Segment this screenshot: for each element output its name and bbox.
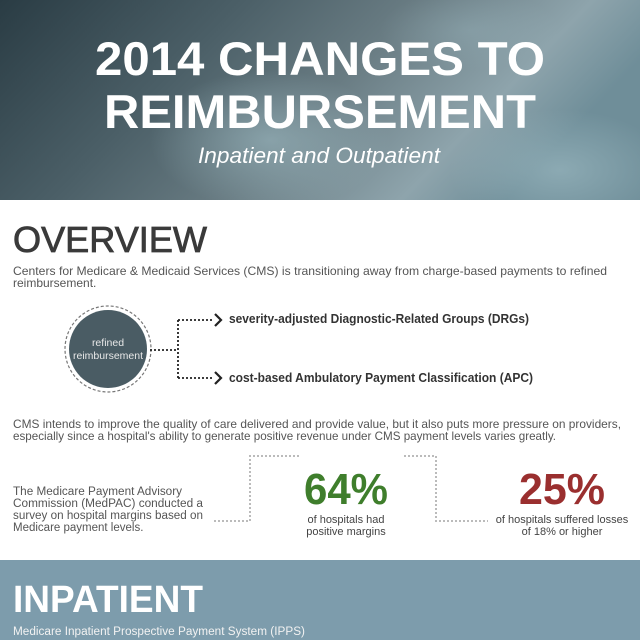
stat: 25%: of 18% or higher [522, 526, 603, 538]
connector arrows [150, 320, 214, 378]
circle: refined reimbursement: refined [92, 337, 124, 349]
circle: refined reimbursement [65, 306, 151, 392]
subtitle: Inpatient and Outpatient [198, 143, 441, 168]
branch labels: severity-adjusted Diagnostic-Related Groups (DRGs) [229, 311, 529, 326]
circle: refined reimbursement: reimbursement [73, 350, 143, 362]
intro text: reimbursement. [13, 276, 96, 290]
MedPAC text [13, 486, 204, 534]
paragraph: pressure: CMS intends to improve the quality of care delivered and provide value, but it also puts more pressure on providers, [13, 417, 621, 431]
paragraph: pressure: especially since a hospital's ability to generate positive revenue under CMS payment levels varies greatly. [13, 429, 556, 443]
header banner [0, 0, 640, 200]
MedPAC text: The Medicare Payment Advisory [13, 486, 182, 498]
stat: 64% [304, 465, 388, 538]
dotted stat connectors [214, 456, 488, 521]
intro text [13, 264, 607, 290]
stat: 64%: positive margins [306, 526, 386, 538]
stat: 64%: 64% [304, 465, 388, 514]
intro text: Centers for Medicare & Medicaid Services (CMS) is transitioning away from charge-based payments to refined [13, 264, 607, 278]
stat: 64%: of hospitals had [307, 514, 385, 526]
diagram: refined reimbursement [65, 306, 533, 392]
MedPAC text: Commission (MedPAC) conducted a [13, 498, 204, 510]
stat: 25%: 25% [519, 465, 605, 514]
branch labels: cost-based Ambulatory Payment Classification (APC) [229, 370, 533, 385]
MedPAC text: Medicare payment levels. [13, 522, 143, 534]
branch labels [229, 311, 533, 385]
subheading: Medicare Inpatient Prospective Payment System (IPPS) [13, 626, 305, 638]
title: REIMBURSEMENT [104, 85, 536, 138]
title [96, 42, 543, 128]
section band: inpatient [0, 560, 640, 640]
MedPAC text: survey on hospital margins based on [13, 510, 203, 522]
stat: 25% [496, 465, 629, 538]
stat: 25%: of hospitals suffered losses [496, 514, 629, 526]
title: 2014 CHANGES TO [95, 32, 545, 85]
paragraph: pressure [13, 417, 621, 443]
heading: overview: OVERVIEW [13, 219, 207, 260]
heading: inpatient: INPATIENT [13, 579, 203, 621]
